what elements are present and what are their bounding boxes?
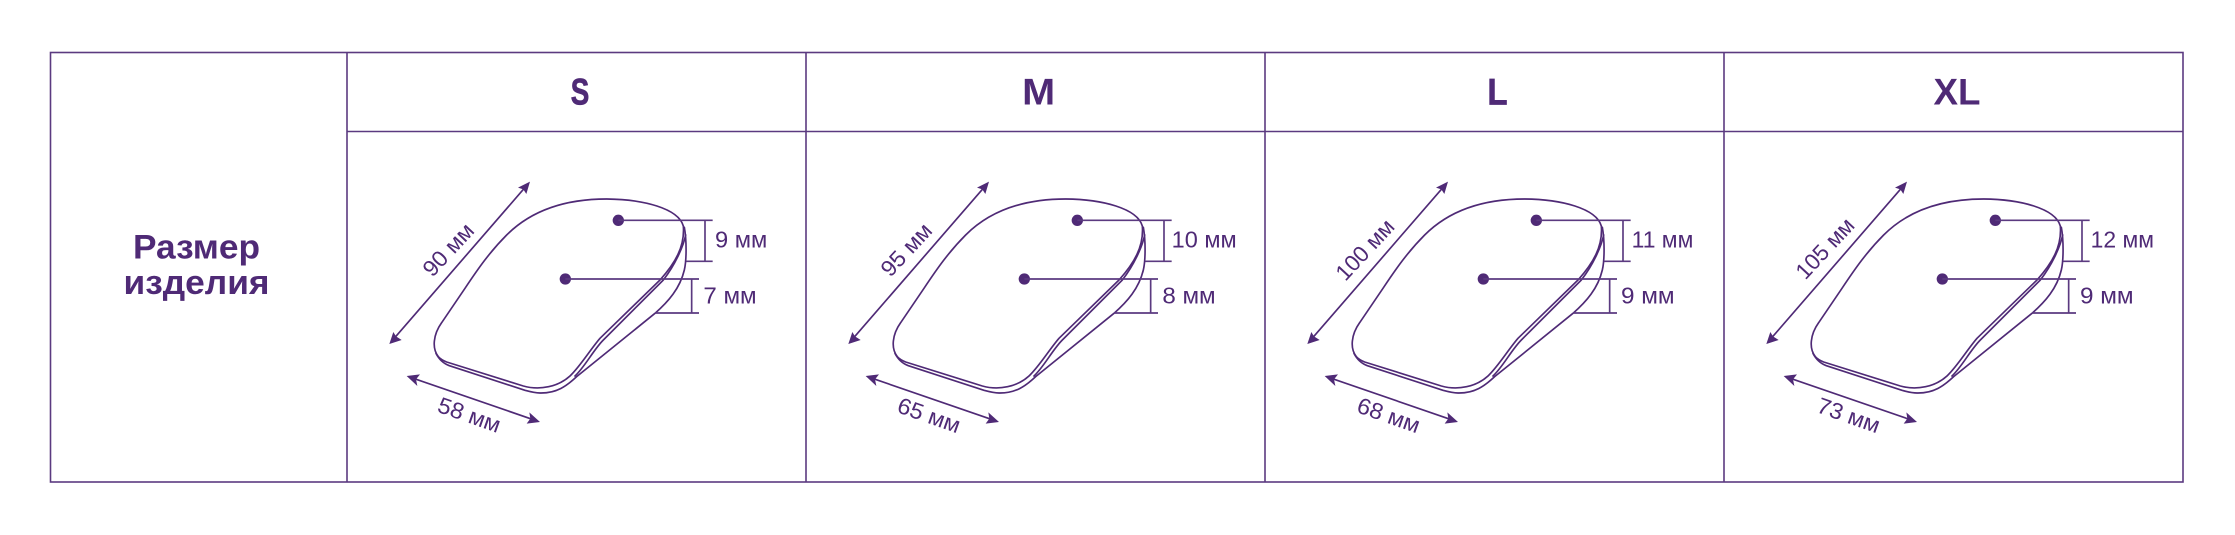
arrow: width XL bbox=[1784, 374, 1917, 424]
thickness callout: lower XL bbox=[1937, 273, 2076, 313]
label: 9 mm: 9 мм bbox=[1621, 282, 1675, 308]
row heading: product size: изделия bbox=[124, 264, 270, 302]
thickness callout: lower M bbox=[1019, 273, 1158, 313]
thickness callout: upper M bbox=[1072, 215, 1172, 261]
thickness callout: upper S bbox=[613, 215, 713, 261]
label: 8 mm: 8 мм bbox=[1162, 282, 1216, 308]
label: 11 mm: 11 мм bbox=[1632, 226, 1693, 252]
thickness callout: upper XL bbox=[1990, 215, 2090, 261]
column heading: M: M bbox=[1022, 72, 1055, 112]
insole diagram L bbox=[1352, 199, 1604, 393]
panel: size S bbox=[389, 182, 767, 438]
thickness callout: lower S bbox=[560, 273, 699, 313]
panel: size XL bbox=[1766, 182, 2154, 438]
label: 105 mm: 105 мм bbox=[1790, 212, 1859, 284]
size table grid bbox=[50, 52, 2183, 482]
label: 9 mm: 9 мм bbox=[715, 226, 767, 252]
label: 100 mm: 100 мм bbox=[1330, 214, 1399, 285]
arrow: width L bbox=[1325, 374, 1458, 424]
label: 90 mm: 90 мм bbox=[417, 217, 479, 281]
label: 73 mm: 73 мм bbox=[1814, 392, 1884, 438]
label: 68 mm: 68 мм bbox=[1354, 392, 1424, 438]
column heading: XL: XL bbox=[1934, 72, 1980, 112]
arrow: length M bbox=[848, 182, 989, 344]
insole diagram M bbox=[893, 199, 1145, 393]
panel: size M bbox=[848, 182, 1237, 438]
arrow: length S bbox=[389, 182, 530, 344]
insole diagram XL bbox=[1811, 199, 2063, 393]
label: 9 mm: 9 мм bbox=[2080, 282, 2134, 308]
row heading: product size: Размер bbox=[133, 228, 260, 266]
arrow: length XL bbox=[1766, 182, 1907, 344]
label: 65 mm: 65 мм bbox=[894, 392, 964, 438]
arrow: length L bbox=[1307, 182, 1448, 344]
label: 58 mm: 58 мм bbox=[434, 392, 504, 438]
insole diagram S bbox=[434, 199, 686, 393]
label: 7 mm: 7 мм bbox=[703, 282, 757, 308]
column heading: S: S bbox=[571, 72, 589, 112]
thickness callout: lower L bbox=[1478, 273, 1617, 313]
arrow: width S bbox=[407, 374, 540, 424]
arrow: width M bbox=[866, 374, 999, 424]
thickness callout: upper L bbox=[1531, 215, 1631, 261]
label: 95 mm: 95 мм bbox=[875, 217, 937, 281]
label: 10 mm: 10 мм bbox=[1172, 226, 1237, 252]
label: 12 mm: 12 мм bbox=[2091, 226, 2154, 252]
column heading: L: L bbox=[1488, 72, 1508, 112]
panel: size L bbox=[1307, 182, 1693, 438]
